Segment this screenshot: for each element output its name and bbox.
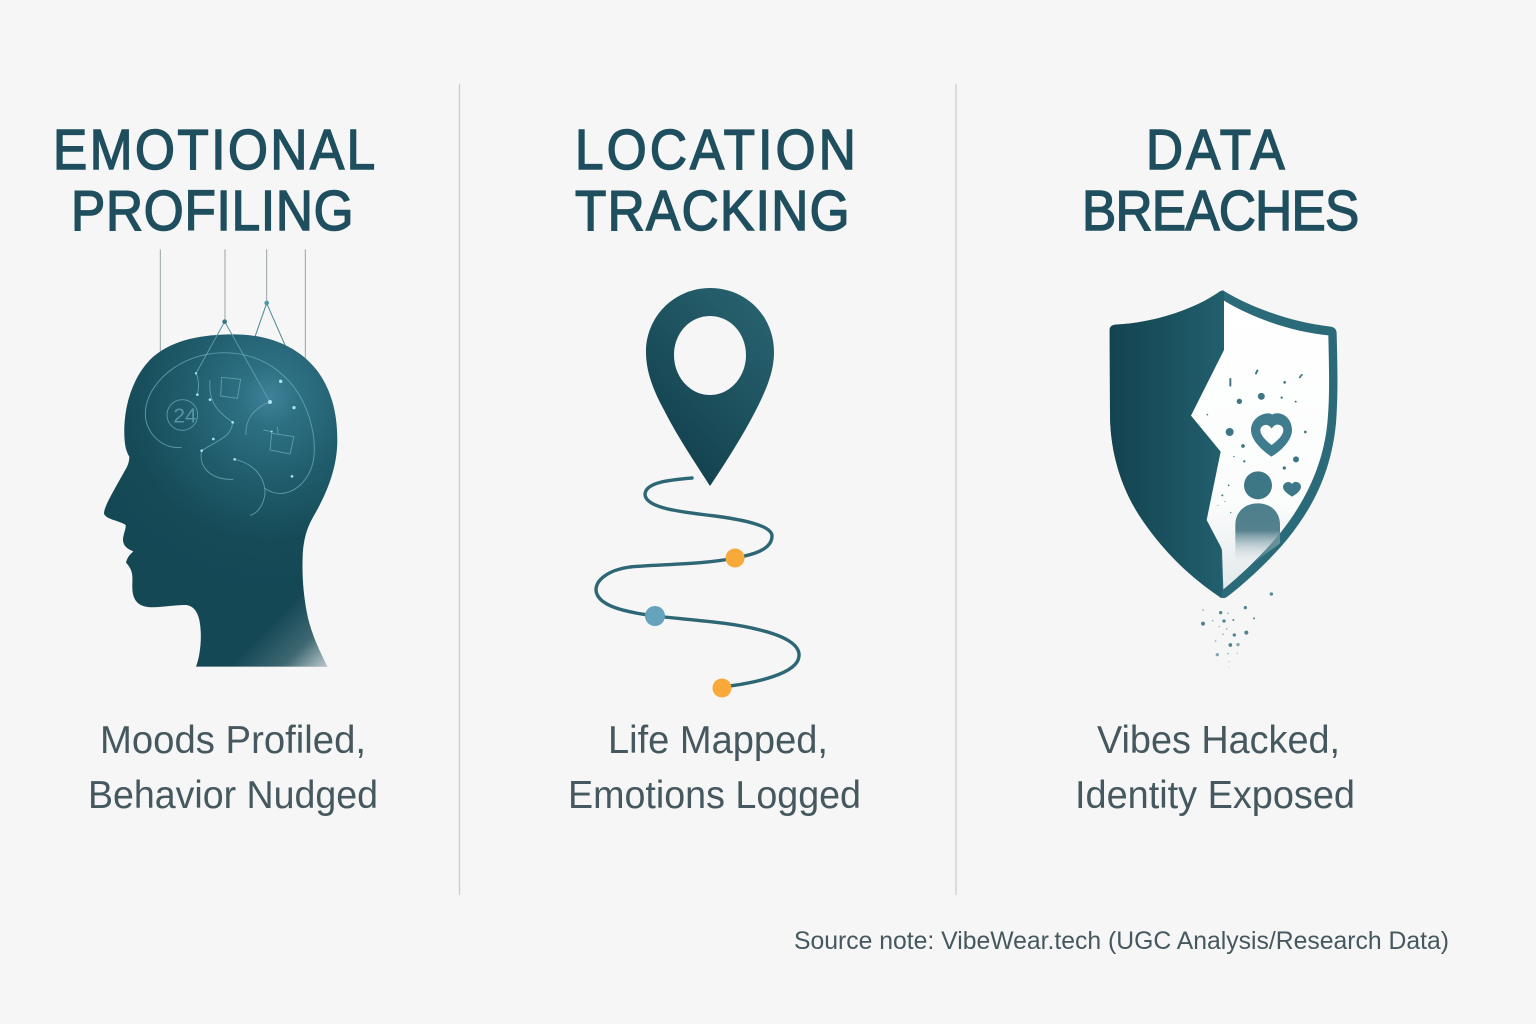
large heart: [1251, 413, 1292, 457]
route markers: [645, 548, 744, 698]
heading: location tracking: [575, 119, 856, 243]
small heart: [1283, 482, 1301, 497]
brain circuitry: [145, 353, 314, 515]
heading: emotional profiling: [53, 119, 375, 243]
shield interior: [1191, 301, 1329, 589]
panel: emotional profiling: [53, 119, 378, 817]
heading: data breaches: [1082, 119, 1359, 243]
icon: map pin: [646, 288, 774, 486]
panel: data breaches: [1075, 119, 1359, 817]
caption: moods profiled: [88, 719, 378, 817]
heading: data breaches: BREACHES: [1082, 180, 1359, 243]
panel: location tracking: [568, 119, 861, 817]
particles below shield: [1201, 592, 1273, 668]
caption: vibes hacked: Identity Exposed: [1075, 774, 1355, 817]
person: [1244, 471, 1272, 499]
caption: moods profiled: Moods Profiled,: [100, 719, 366, 762]
caption: vibes hacked: Vibes Hacked,: [1097, 719, 1340, 762]
icon: head with puppet strings: [104, 249, 337, 667]
icon: head with puppet strings: 24: [173, 404, 197, 427]
shield outline: [1110, 290, 1337, 598]
heading: emotional profiling: PROFILING: [71, 180, 354, 243]
caption: moods profiled: Behavior Nudged: [88, 774, 378, 817]
head silhouette: [104, 334, 337, 667]
shield dark half: [1110, 291, 1224, 598]
caption: life mapped: Emotions Logged: [568, 774, 861, 817]
icon: cracked shield: [1110, 290, 1337, 668]
caption: vibes hacked: [1075, 719, 1355, 817]
heading: location tracking: TRACKING: [575, 180, 850, 243]
heading: location tracking: LOCATION: [575, 119, 856, 182]
source note: Source note: VibeWear.tech (UGC Analysis/Research Data): [794, 927, 1449, 955]
heading: data breaches: DATA: [1146, 119, 1285, 182]
caption: life mapped: [568, 719, 861, 817]
heading: emotional profiling: EMOTIONAL: [53, 119, 375, 182]
caption: life mapped: Life Mapped,: [608, 719, 828, 762]
debris: [1206, 369, 1307, 513]
route path: [596, 478, 799, 687]
